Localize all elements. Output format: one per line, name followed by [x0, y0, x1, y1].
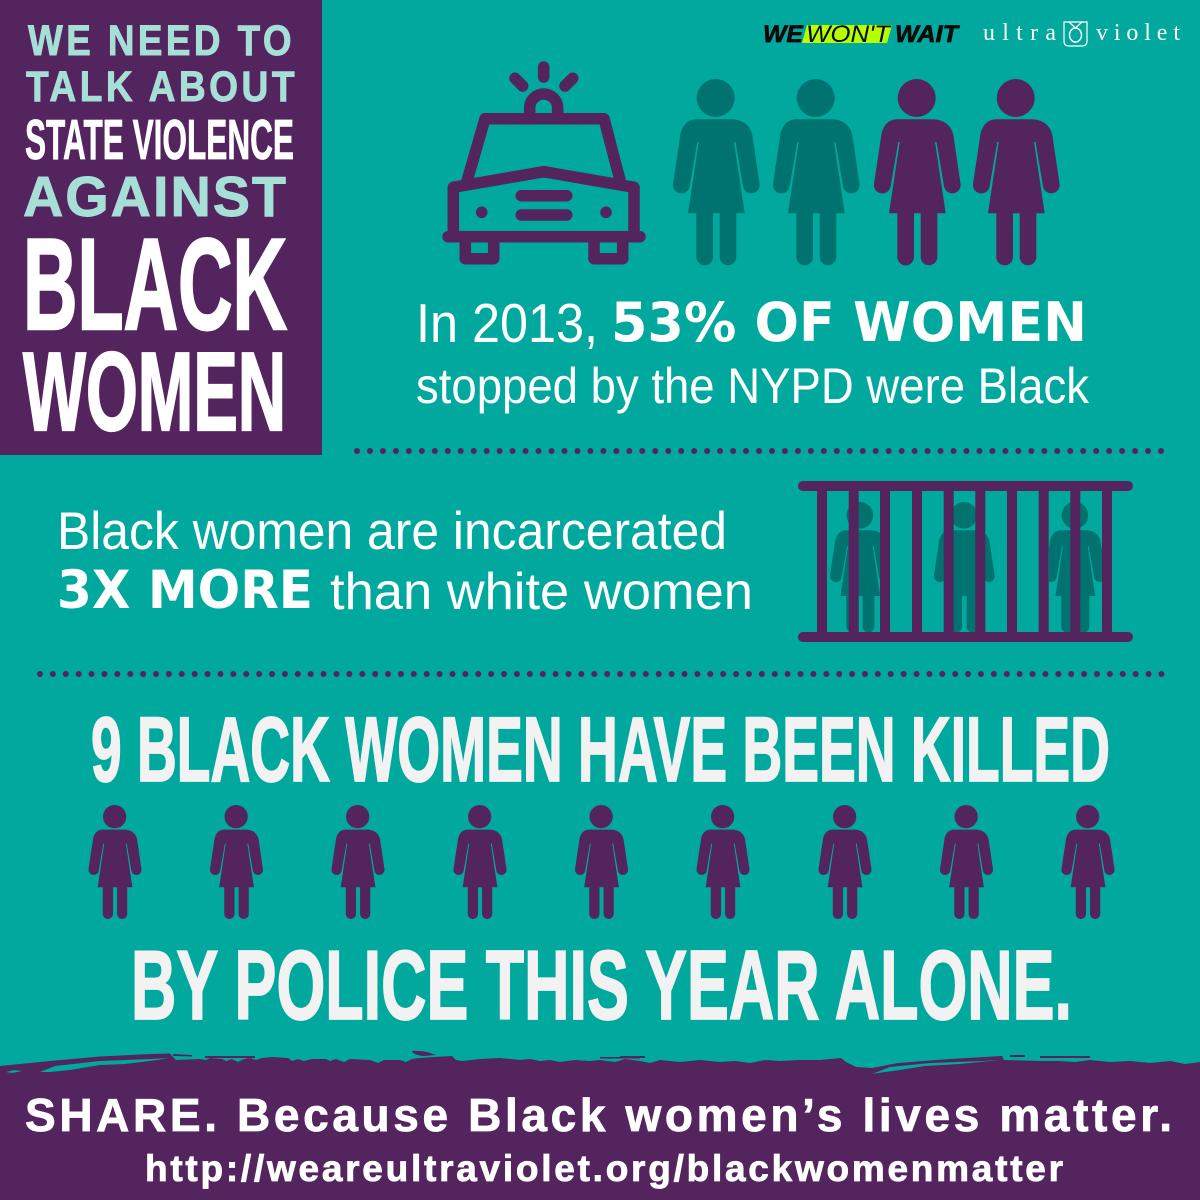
- text block: NYPD stat: In 2013,: [416, 292, 598, 354]
- text block: NYPD stat: stopped by the NYPD were Black: [416, 358, 1090, 414]
- logo: ultraviolet: violet: [1096, 20, 1180, 46]
- icon: woman 3 purple: [874, 79, 961, 265]
- jailed woman 2: [934, 502, 995, 632]
- logo: we won't wait: WAIT: [895, 21, 960, 48]
- heading line: we need to: WE NEED TO: [28, 17, 295, 65]
- logo: we won't wait: [763, 21, 960, 48]
- icon row: nine women: [88, 805, 1115, 919]
- icon: woman 4 purple: [973, 79, 1060, 265]
- heading line: against: AGAINST: [23, 165, 288, 229]
- text block: NYPD stat: [416, 291, 1090, 414]
- heading line: black: BLACK: [23, 211, 287, 357]
- panel: title block: [0, 0, 322, 455]
- text block: incarceration stat: 3X MORE: [57, 560, 313, 621]
- heading line: talk about: TALK ABOUT: [26, 63, 298, 111]
- text block: incarceration stat: than white women: [330, 563, 753, 621]
- logo: ultraviolet: [983, 20, 1180, 46]
- logo: we won't wait: WE: [763, 21, 804, 48]
- jailed woman 1: [830, 502, 880, 632]
- icon: police car: [448, 67, 640, 259]
- text block: incarceration stat: [57, 502, 753, 621]
- icon: women behind bars: [798, 481, 1133, 642]
- logo: we won't wait: WON'T: [806, 21, 893, 48]
- heading line: women: WOMEN: [23, 330, 286, 454]
- cell bars: [798, 481, 1133, 642]
- footer band: [0, 1051, 1200, 1200]
- text block: incarceration stat: Black women are incarcerated: [57, 502, 727, 561]
- url: http://weareultraviolet.org/blackwomenmatter: [145, 1148, 1063, 1189]
- heading line: state violence: STATE VIOLENCE: [25, 108, 294, 172]
- call to action: SHARE. Because Black women’s lives matter.: [25, 1089, 1172, 1141]
- text block: NYPD stat: 53% OF WOMEN: [611, 291, 1087, 354]
- jailed woman 3: [1049, 502, 1102, 632]
- icon: woman 1 teal: [673, 79, 760, 265]
- logo: ultraviolet: ultra: [983, 20, 1056, 46]
- icon: woman 2 teal: [773, 79, 860, 265]
